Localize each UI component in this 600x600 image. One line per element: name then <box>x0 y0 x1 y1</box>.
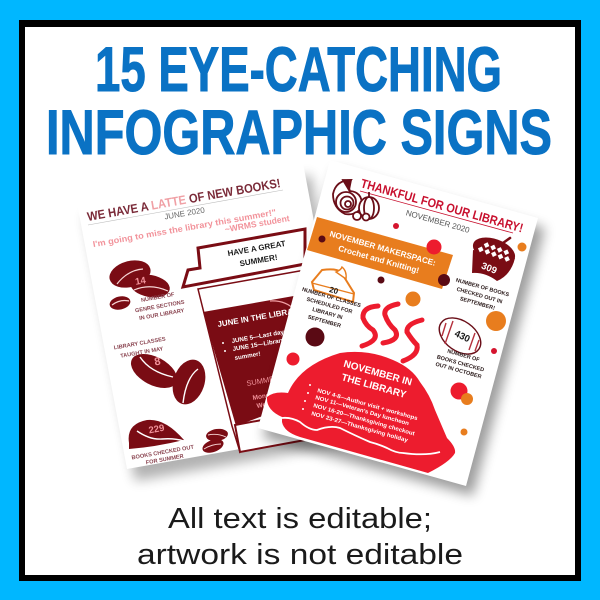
makerspace banner: Crochet and Knitting! <box>337 244 420 275</box>
icon: pie slice, 20 classes: LIBRARY IN <box>311 307 343 321</box>
coffee beans: 229 books <box>129 420 229 466</box>
pie with November events: NOVEMBER IN <box>342 359 413 388</box>
icon: pie slice, 20 classes: 20 <box>328 285 340 296</box>
coffee cup: Wednesday <box>256 397 293 410</box>
coffee beans: 229 books: BOOKS CHECKED OUT <box>131 444 195 461</box>
icon: acorn, 309 books: 309 <box>480 261 498 277</box>
coffee beans: 14 genre sections: GENRE SECTIONS <box>135 300 185 314</box>
poster: June latte infographic <box>77 163 361 481</box>
coffee beans: 8 library classes: TAUGHT IN MAY <box>120 346 164 360</box>
makerspace banner: NOVEMBER MAKERSPACE: <box>329 229 437 268</box>
icon: football, 430 books <box>433 311 487 380</box>
poster heading: NOVEMBER 2020 <box>405 208 471 235</box>
pie with November events <box>267 352 455 473</box>
coffee beans: 14 genre sections: NUMBER OF <box>141 292 176 304</box>
icon: football, 430 books: OUT IN OCTOBER <box>435 362 482 380</box>
pie with November events: NOV 11—Veteran's Day luncheon <box>314 395 410 427</box>
coffee cup: JUNE 15—Library closes for <box>232 332 316 353</box>
poster: November thankful infographic <box>258 160 545 496</box>
makerspace banner <box>307 217 453 289</box>
coffee cup: JUNE 5—Last day of school <box>231 324 314 345</box>
coffee cup <box>183 229 316 452</box>
coffee cup: SUMMER HOURS <box>246 368 309 388</box>
decorative dots <box>286 223 526 436</box>
poster heading: JUNE 2020 <box>164 205 206 222</box>
icon: acorn, 309 books: SEPTEMBER! <box>459 296 496 312</box>
coffee cup: Monday <box>252 391 278 402</box>
caption: artwork is not editable <box>137 539 463 571</box>
coffee beans: 14 genre sections: 14 <box>134 275 147 288</box>
pie with November events: THE LIBRARY <box>340 372 408 401</box>
coffee beans: 14 genre sections <box>106 256 185 322</box>
pie with November events: NOV 16-20—Thanksgiving checkout <box>312 403 415 437</box>
poster heading: WE HAVE A LATTE OF NEW BOOKS! <box>86 176 282 224</box>
icon: football, 430 books: 430 <box>453 328 472 345</box>
coffee beans: 8 library classes <box>113 336 211 409</box>
icon: football, 430 books: BOOKS CHECKED <box>436 355 485 374</box>
coffee beans: 8 library classes: 8 <box>153 356 162 368</box>
icon: pie slice, 20 classes: SCHEDULED FOR <box>306 297 353 315</box>
coffee cup: HAVE A GREAT <box>227 239 286 258</box>
coffee beans: 14 genre sections: IN OUR LIBRARY <box>139 308 185 322</box>
pie with November events: NOV 23-27—Thanksgiving holiday <box>310 411 409 444</box>
coffee cup: JUNE IN THE LIBRARY <box>217 305 305 329</box>
poster heading: THANKFUL FOR OUR LIBRARY! <box>359 176 525 235</box>
title <box>46 35 552 168</box>
student quote: ~WRMS student <box>224 213 290 234</box>
caption: All text is editable; <box>168 503 432 535</box>
icon: pie slice, 20 classes: NUMBER OF CLASSES <box>301 287 362 309</box>
coffee cup: summer! <box>234 351 261 362</box>
icon: football, 430 books: NUMBER OF <box>446 349 481 364</box>
coffee beans: 229 books: 229 <box>148 423 165 436</box>
coffee cup: SUMMER! <box>239 253 278 268</box>
icon: acorn, 309 books: NUMBER OF BOOKS <box>455 278 510 298</box>
icon: pie slice, 20 classes: SEPTEMBER <box>307 315 342 330</box>
pie with November events: NOV 4-8—Author visit + workshops <box>316 388 418 422</box>
icon: cornucopia <box>333 180 379 220</box>
caption <box>137 503 463 571</box>
icon: acorn, 309 books <box>455 232 519 312</box>
coffee beans: 8 library classes: LIBRARY CLASSES <box>113 336 166 352</box>
icon: pie slice, 20 classes <box>301 267 362 330</box>
steam squiggles <box>362 304 422 361</box>
coffee beans: 229 books: FOR SUMMER <box>145 454 184 466</box>
icon: acorn, 309 books: CHECKED OUT IN <box>456 287 503 305</box>
student quote: I'm going to miss the library this summer!" <box>92 207 277 249</box>
